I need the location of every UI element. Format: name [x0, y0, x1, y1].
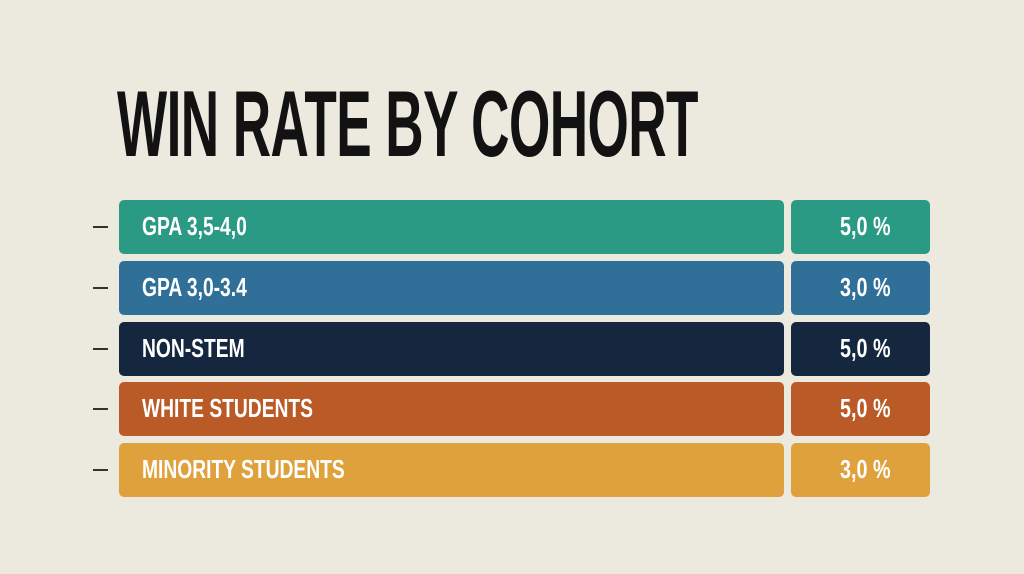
- row: White students: WHITE STUDENTS: [142, 393, 313, 423]
- title: WIN RATE BY COHORT: [117, 71, 698, 176]
- row: Minority students: 3,0 %: [840, 454, 891, 484]
- row: GPA 3.0-3.4: [93, 261, 930, 315]
- row: GPA 3.0-3.4: GPA 3,0-3.4: [142, 272, 247, 302]
- row: Minority students: MINORITY STUDENTS: [142, 454, 345, 484]
- row: White students: [93, 382, 930, 436]
- row: Non-STEM: [93, 322, 930, 376]
- row: GPA 3.5-4.0: 5,0 %: [840, 211, 891, 241]
- row: GPA 3.0-3.4: 3,0 %: [840, 272, 891, 302]
- row: GPA 3.5-4.0: GPA 3,5-4,0: [142, 211, 247, 241]
- row: White students: 5,0 %: [840, 393, 891, 423]
- row: Non-STEM: NON-STEM: [142, 333, 245, 363]
- row: Non-STEM: 5,0 %: [840, 333, 891, 363]
- row: Minority students: [93, 443, 930, 497]
- row: GPA 3.5-4.0: [93, 200, 930, 254]
